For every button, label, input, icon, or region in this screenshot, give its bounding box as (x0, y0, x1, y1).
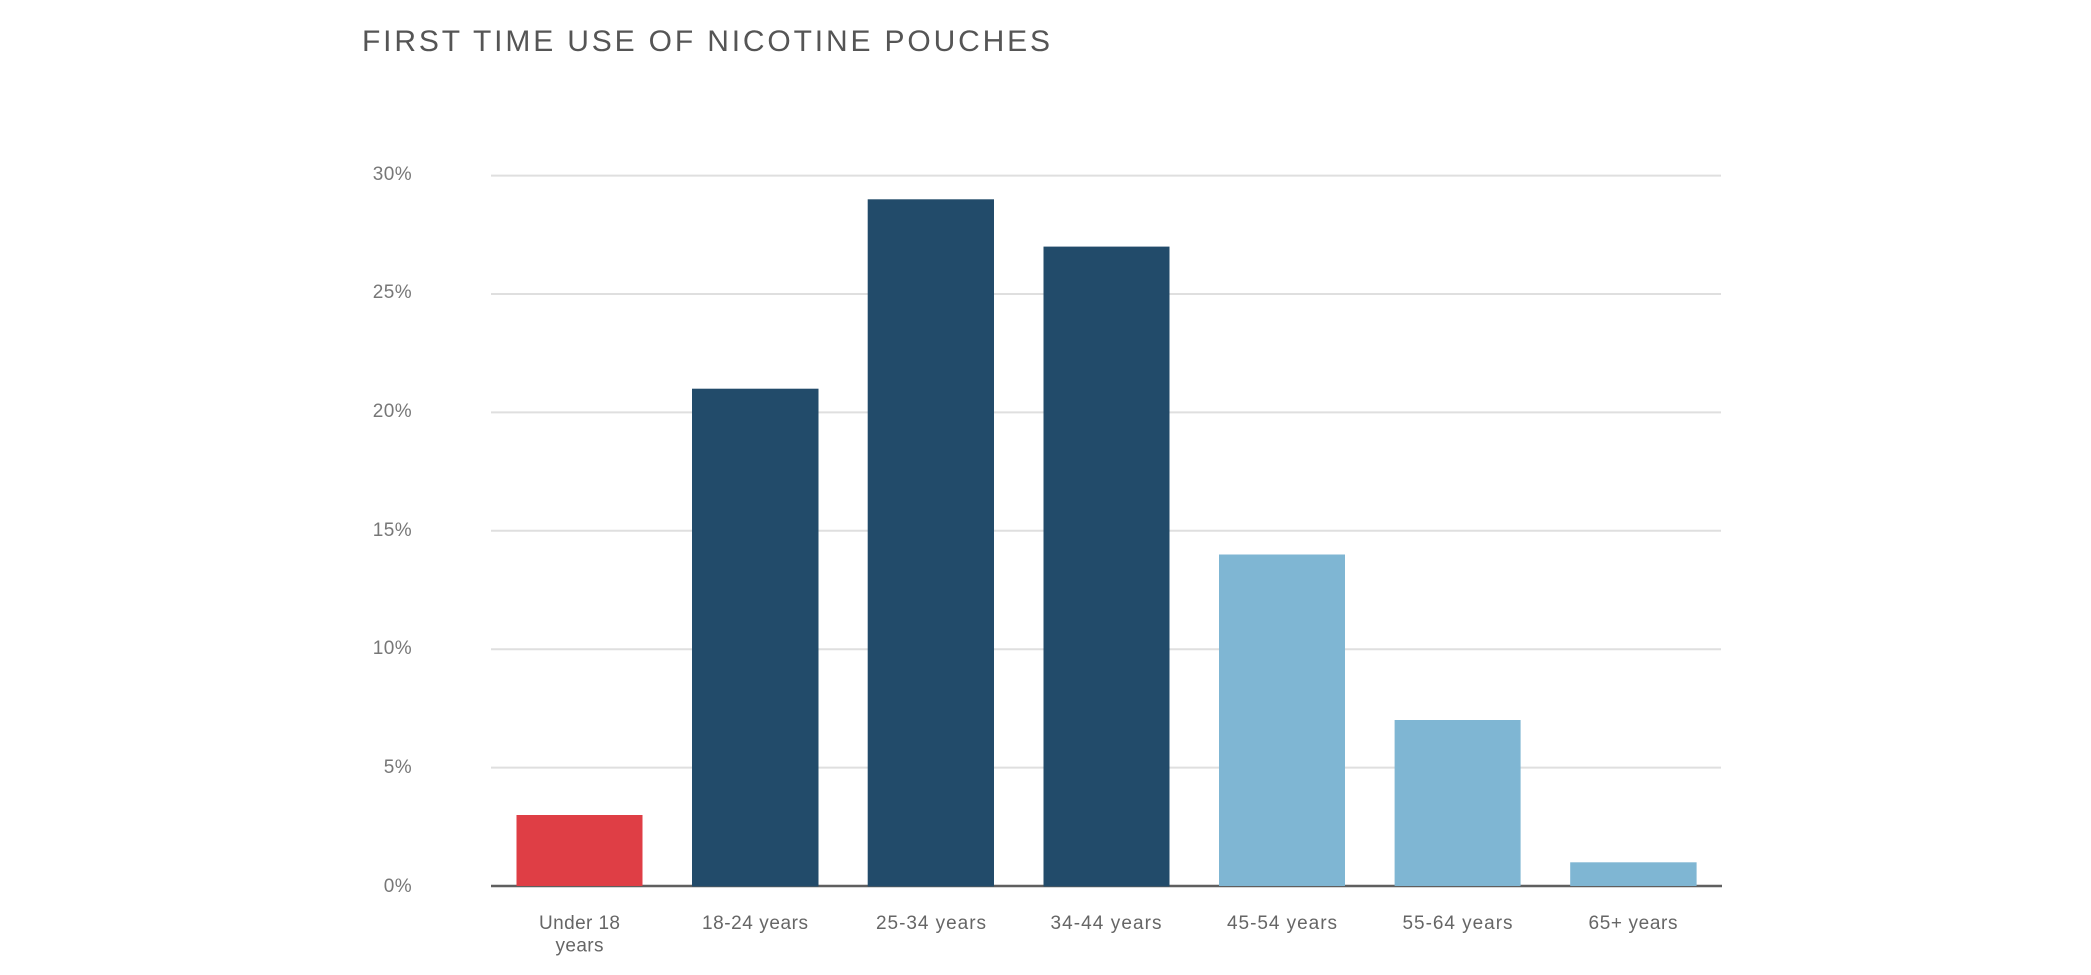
bar: 18-24 years, 21% (692, 389, 818, 886)
title: FIRST TIME USE OF NICOTINE POUCHES (362, 25, 1050, 58)
x axis category labels (539, 913, 1678, 956)
x axis category labels: 18-24 years (702, 913, 808, 934)
bar: Under 18 years, 3% (516, 815, 642, 886)
x axis category labels: Under 18 (539, 913, 620, 934)
bar: 34-44 years, 27% (1044, 247, 1170, 887)
y axis labels: 20% (373, 401, 412, 422)
x axis category labels: 65+ years (1588, 913, 1678, 934)
y axis labels: 10% (373, 638, 412, 659)
bar chart: first time use by age group (373, 164, 1722, 956)
x axis category labels: 55-64 years (1402, 913, 1512, 934)
bar: 25-34 years, 29% (868, 199, 994, 887)
x axis category labels: years (556, 936, 604, 956)
y axis labels: 5% (384, 757, 412, 778)
x axis category labels: 34-44 years (1050, 913, 1162, 934)
y axis labels: 25% (373, 282, 412, 303)
x axis category labels: 45-54 years (1227, 913, 1337, 934)
y axis labels: 0% (384, 876, 412, 897)
x axis line (491, 885, 1722, 887)
bar: 45-54 years, 14% (1219, 554, 1345, 886)
x axis category labels: 25-34 years (876, 913, 986, 934)
bar: 55-64 years, 7% (1395, 720, 1521, 886)
y axis labels (373, 164, 412, 897)
y axis labels: 30% (373, 164, 412, 185)
y axis labels: 15% (373, 520, 412, 541)
bar: 65+ years, 1% (1570, 862, 1697, 886)
